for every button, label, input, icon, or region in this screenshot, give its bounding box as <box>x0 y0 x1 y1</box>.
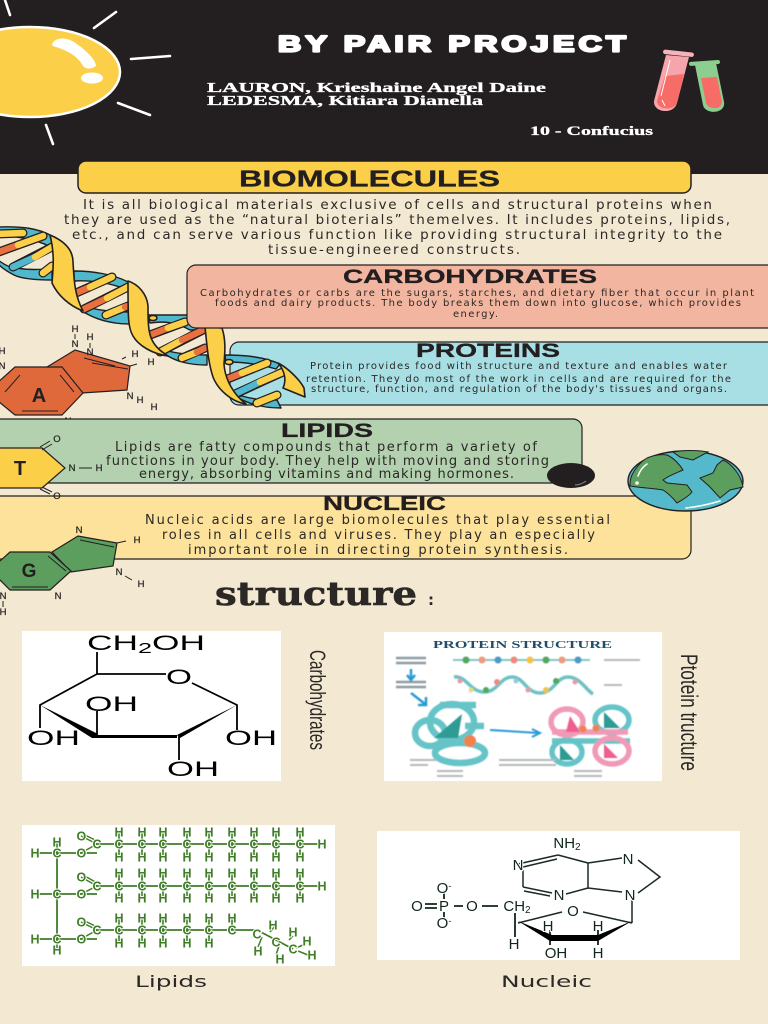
image: nucleic acid structure: NH <box>553 835 575 852</box>
molecule: guanine: H <box>138 579 145 590</box>
caption: lipids: Lipids <box>135 972 207 991</box>
panel: nucleic: NUCLEIC <box>323 494 446 515</box>
molecule: thymine: O <box>53 491 61 502</box>
blue strands <box>0 227 56 250</box>
image: nucleic acid structure: N <box>554 887 564 904</box>
molecule: adenine: H <box>137 395 144 406</box>
caption: carbohydrates: Carbohydrates <box>305 650 330 750</box>
image: lipid structure: HCO <box>30 932 86 946</box>
image: lipid structure: CCCCCCCCCH <box>114 880 327 894</box>
intro text: It is all biological materials exclusive of cells and structural proteins when <box>83 197 712 213</box>
image: carbohydrate structure: OH <box>225 727 277 750</box>
image: lipid structure: CCCCCC <box>114 924 237 938</box>
panel: proteins: retention. They do most of the work in cells and are required for the <box>306 374 731 385</box>
image: nucleic acid structure: H <box>593 918 603 935</box>
image: lipid structure: HCO <box>30 846 86 860</box>
molecule: adenine: N <box>65 416 72 427</box>
image: lipid structure: C <box>252 928 262 942</box>
image: lipid structure: C <box>92 924 102 938</box>
image: lipid structure: CCCCCCCCCH <box>114 838 327 852</box>
panel: nucleic: Nucleic acids are large biomolecules that play essential <box>145 513 610 528</box>
icon: black ball <box>547 463 595 488</box>
image: lipid structure: H <box>288 926 298 940</box>
caption: protein structure: Ptotein tructure <box>675 654 702 771</box>
image: lipid structure: C <box>272 936 281 950</box>
icon: globe <box>628 450 743 511</box>
caption: nucleic: Nucleic <box>501 972 592 991</box>
molecule: guanine: N <box>116 567 123 578</box>
molecule: thymine: T <box>14 458 26 480</box>
image: nucleic acid structure: O <box>411 898 423 915</box>
molecule: adenine: A <box>32 385 46 407</box>
image: nucleic acid structure: - <box>448 916 451 926</box>
panel: carbohydrates: Carbohydrates or carbs are the sugars, starches, and dietary fiber that occur in plant <box>200 288 754 299</box>
image: carbohydrate structure: OH <box>85 693 138 716</box>
image: lipid structure: H <box>308 948 317 962</box>
image: carbohydrate structure: OH <box>27 727 80 750</box>
panel: lipids: energy, absorbing vitamins and making hormones. <box>139 467 514 482</box>
panel: nucleic: roles in all cells and viruses. They play an especially <box>162 528 595 543</box>
image: carbohydrate structure: CH <box>87 632 117 655</box>
image: nucleic acid structure: O <box>567 903 579 920</box>
image: nucleic acid structure: N <box>623 851 633 868</box>
molecule: thymine: N <box>69 463 76 474</box>
image: lipid structure: C <box>92 880 102 894</box>
image: nucleic acid structure: P <box>439 898 449 915</box>
image: nucleic acid structure: N <box>625 887 635 904</box>
panel: lipids <box>0 419 582 483</box>
image: lipid structure: C <box>92 838 102 852</box>
image: lipid structure: HHHHHHHHH <box>114 826 305 840</box>
molecule: guanine: G <box>22 561 36 582</box>
panel: lipids: functions in your body. They help with moving and storing <box>106 454 549 469</box>
panel: carbohydrates: foods and dairy products. The body breaks them down into glucose, which provides <box>215 298 741 309</box>
image: carbohydrate structure: OH <box>167 758 219 781</box>
molecule: adenine: N <box>87 347 94 358</box>
image: lipid structure: HHHHHHHHH <box>114 866 305 880</box>
panel: nucleic: important role in directing protein synthesis. <box>188 543 568 558</box>
image: nucleic acid structure: H <box>509 936 519 953</box>
image: lipid structure: HHHHHHHHH <box>114 892 305 906</box>
molecule: adenine: H <box>132 349 139 360</box>
molecule: adenine: H <box>151 402 158 413</box>
authors: LAURON, Krieshaine Angel Daine <box>207 80 546 95</box>
image: carbohydrate structure: O <box>166 666 192 689</box>
yellow ribbons <box>50 235 83 311</box>
intro text: etc., and can serve various function like providing structural integrity to the <box>72 227 722 243</box>
icon: sun <box>0 0 170 144</box>
image: lipid structure: O <box>76 916 86 930</box>
image: nucleic acid structure: 2 <box>525 905 531 916</box>
intro text <box>64 197 730 258</box>
image: nucleic acid structure: H <box>543 918 553 935</box>
image: lipid structure: H <box>276 952 285 966</box>
image: lipid structure: O <box>76 830 86 844</box>
panel: lipids: Lipids are fatty compounds that perform a variety of <box>115 440 537 455</box>
image: lipid structure: H <box>302 934 312 948</box>
image: lipid structure: HCO <box>30 888 86 902</box>
image: nucleic acid structure: OH <box>545 945 567 962</box>
heading: structure: : <box>428 591 434 609</box>
heading banner <box>78 161 691 193</box>
image: protein structure <box>384 632 662 781</box>
image: lipid structure <box>22 825 335 966</box>
title: BY PAIR PROJECT <box>278 32 630 56</box>
image: lipid structure: H <box>52 836 62 850</box>
image: protein structure: PROTEIN STRUCTURE <box>433 639 612 651</box>
base pair rungs <box>0 233 283 403</box>
heading banner: BIOMOLECULES <box>239 166 500 192</box>
panel: carbohydrates: CARBOHYDRATES <box>343 267 597 288</box>
image: lipid structure: HHHHHHHHH <box>114 850 305 864</box>
molecule: adenine: H <box>72 324 79 335</box>
molecule: adenine: N <box>127 391 134 402</box>
panel: proteins: PROTEINS <box>416 341 560 362</box>
molecule: guanine: N <box>76 525 83 536</box>
section label: 10 - Confucius <box>530 124 653 138</box>
molecule: thymine: H <box>96 463 103 474</box>
image: nucleic acid structure: - <box>448 881 451 891</box>
image: nucleic acid structure: CH <box>503 898 525 915</box>
image: nucleic acid structure: N <box>513 857 523 874</box>
panel: proteins: structure, function, and regulation of the body's tissues and organs. <box>311 384 727 395</box>
image: lipid structure: HHHHHH <box>114 912 237 926</box>
panel: nucleic <box>0 494 691 559</box>
image: lipid structure: H <box>268 918 278 932</box>
molecule: adenine: H <box>148 357 155 368</box>
authors <box>207 80 546 108</box>
image: lipid structure: H <box>254 944 263 958</box>
image: nucleic acid structure <box>377 831 740 962</box>
panel: proteins: Protein provides food with structure and texture and enables water <box>310 361 728 372</box>
intro text: they are used as the “natural bioterials” themelves. It includes proteins, lipids, <box>64 212 730 228</box>
image: lipid structure: C <box>288 942 298 956</box>
illustration: DNA helix <box>0 227 305 408</box>
molecule: guanine: H <box>134 535 141 546</box>
intro text: tissue-engineered constructs. <box>268 242 520 258</box>
authors: LEDESMA, Kitiara Dianella <box>207 93 483 108</box>
image: lipid structure: O <box>76 870 86 884</box>
image: carbohydrate structure: OH <box>152 632 205 655</box>
molecule: adenine <box>0 324 158 432</box>
molecule: guanine <box>0 525 145 618</box>
panel: proteins <box>230 341 768 405</box>
molecule: thymine <box>0 434 103 502</box>
panel: lipids: LIPIDS <box>281 421 373 442</box>
image: nucleic acid structure: O <box>437 880 448 897</box>
molecule: adenine: H <box>87 332 94 343</box>
image: nucleic acid structure: O <box>466 898 478 915</box>
image: lipid structure: HHHHH <box>114 936 214 950</box>
header band <box>0 0 768 174</box>
image: carbohydrate structure <box>22 631 281 781</box>
icon: test tubes <box>654 49 724 112</box>
panel: carbohydrates <box>187 265 768 328</box>
image: lipid structure: H <box>52 944 62 958</box>
panel: carbohydrates: energy. <box>453 309 498 320</box>
heading: structure: structure <box>215 574 417 613</box>
image: nucleic acid structure: O <box>437 915 448 932</box>
molecule: adenine: N <box>72 339 79 350</box>
molecule: guanine: N <box>55 591 62 602</box>
image: nucleic acid structure: 2 <box>575 842 581 853</box>
molecule: thymine: O <box>53 434 61 445</box>
image: carbohydrate structure: 2 <box>138 640 152 657</box>
image: nucleic acid structure: H <box>593 945 603 962</box>
